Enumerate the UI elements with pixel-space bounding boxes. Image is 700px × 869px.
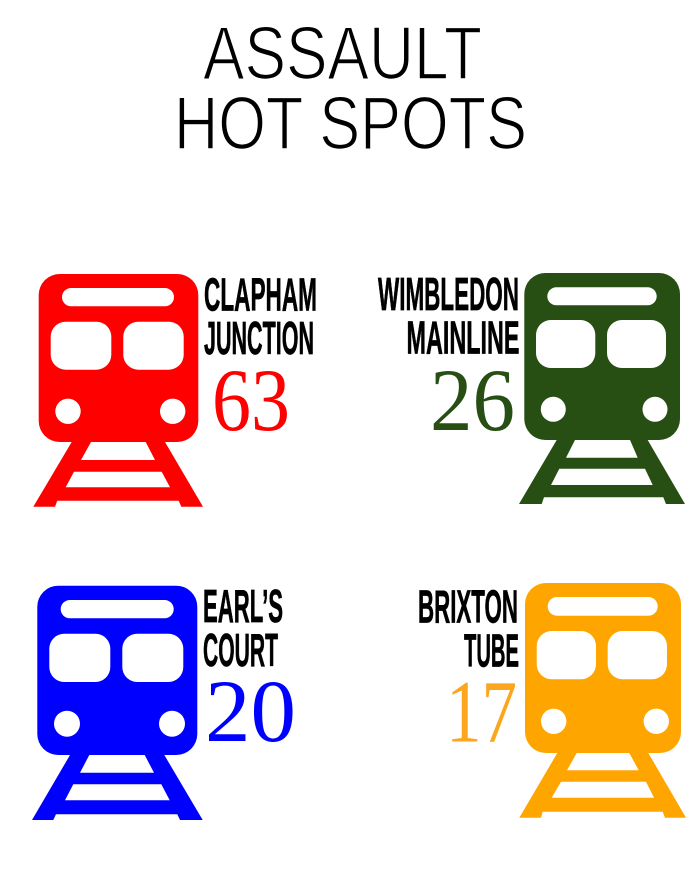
icon: green train — [519, 273, 685, 504]
assault count: 63 — [212, 352, 290, 450]
text: CLAPHAM — [204, 268, 317, 320]
panel: Wimbledon Mainline: WIMBLEDON — [378, 268, 519, 320]
icon: blue train — [32, 586, 203, 820]
station label — [203, 580, 283, 676]
panel: Brixton Tube — [418, 580, 686, 818]
title — [174, 11, 527, 165]
assault count: 26 — [430, 352, 515, 450]
assault count: 17 — [446, 664, 517, 762]
station label: MAINLINE — [406, 312, 520, 364]
assault count: 20 — [205, 663, 296, 761]
icon: red train — [33, 274, 203, 507]
panel: Brixton Tube: BRIXTON — [418, 580, 518, 632]
panel: Earl's Court: COURT — [203, 624, 278, 676]
station label — [418, 580, 519, 676]
title: ASSAULT — [203, 11, 482, 95]
station label — [378, 268, 520, 364]
panel: Wimbledon Mainline — [378, 268, 685, 504]
panel: Brixton Tube: TUBE — [464, 624, 519, 676]
panel: Earl's Court: EARL’S — [203, 580, 283, 632]
station label — [204, 268, 317, 364]
panel: Clapham Junction — [33, 268, 317, 507]
text: JUNCTION — [204, 312, 314, 364]
title: HOT SPOTS — [174, 81, 527, 165]
panel: Earl's Court — [32, 580, 296, 820]
icon: orange train — [519, 583, 686, 818]
